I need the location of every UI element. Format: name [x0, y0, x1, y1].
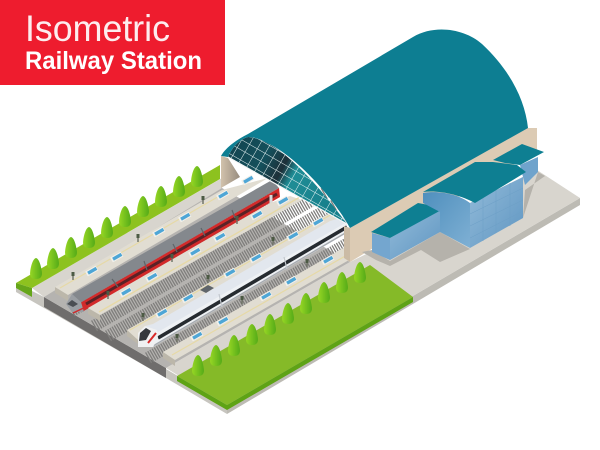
benches and lamps on platform 1 — [72, 177, 253, 280]
front lawn — [177, 265, 413, 410]
red train — [66, 180, 280, 313]
row of trees: back strip — [30, 166, 203, 279]
title banner — [0, 0, 225, 85]
arched hall roof — [221, 30, 528, 228]
platform 3 — [127, 213, 345, 344]
shadows of annex — [362, 172, 545, 266]
white train — [138, 216, 347, 347]
back grass strip — [16, 165, 220, 297]
glazed arch — [228, 137, 347, 224]
row of trees: front lawn — [192, 262, 366, 376]
platform 4 — [163, 247, 349, 366]
benches and lamps on platform 2 — [106, 198, 288, 299]
benches and lamps on platform 3 — [142, 219, 323, 321]
back annex — [493, 144, 544, 185]
main annex block — [423, 162, 526, 248]
low annex — [371, 203, 445, 260]
title banner: Railway Station — [25, 47, 202, 75]
title banner: Isometric — [25, 8, 170, 49]
railway tracks — [72, 190, 350, 358]
track floor — [44, 188, 350, 368]
left pillar of hall — [221, 156, 240, 188]
benches and lamps on platform 4 — [176, 257, 333, 342]
platform 1 — [55, 178, 268, 301]
concrete base slab — [16, 170, 580, 414]
station wall — [344, 128, 537, 262]
platform 2 — [88, 196, 302, 321]
